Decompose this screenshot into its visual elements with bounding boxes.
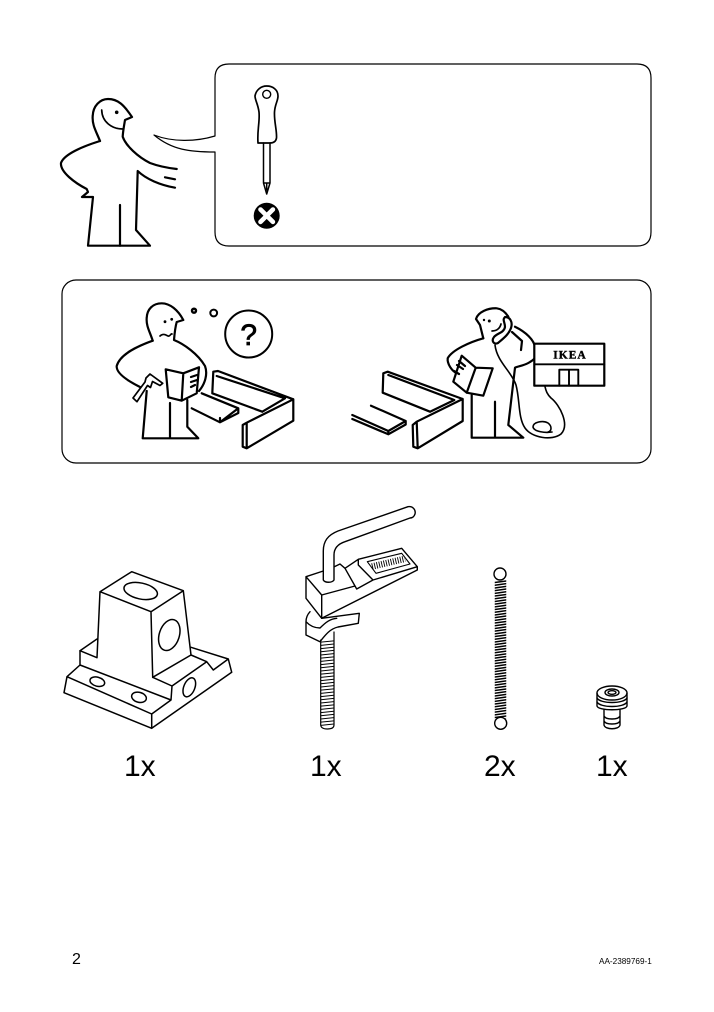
- document code: AA-2389769-1: [599, 957, 652, 966]
- quantity labels: [124, 750, 628, 783]
- clamp jaw: [306, 612, 359, 642]
- boards: [212, 371, 293, 448]
- icon: screwdriver: [255, 86, 278, 194]
- quantity labels: 1x: [124, 750, 156, 783]
- thought bubbles: ?: [240, 319, 257, 352]
- part: barrel nut: [597, 686, 627, 729]
- thought bubbles: [192, 309, 272, 358]
- part: clamp: [306, 507, 417, 729]
- quantity labels: 1x: [596, 750, 628, 783]
- part: mounting block: [64, 572, 232, 728]
- book: [166, 367, 199, 401]
- panel: no electric screwdriver callout: [154, 64, 651, 246]
- boards: [383, 372, 463, 448]
- figure: man phoning IKEA: [352, 308, 604, 448]
- threaded bolt: [321, 632, 334, 729]
- grip hatch: [367, 553, 410, 573]
- clamp body: [306, 548, 417, 618]
- panel: call IKEA advice: [62, 280, 651, 463]
- figure: confused man with book and hammer: [117, 303, 293, 448]
- part: threaded rod: [494, 568, 507, 729]
- book: [453, 356, 493, 396]
- quantity labels: 1x: [310, 750, 342, 783]
- telephone handset: [493, 317, 522, 350]
- IKEA store: IKEA: [553, 349, 587, 361]
- IKEA store: [534, 344, 604, 386]
- phone cord: [495, 345, 565, 438]
- clamp handle: [323, 507, 415, 582]
- page number: 2: [72, 951, 81, 968]
- figure: pointing man: [61, 99, 177, 246]
- hammer: [133, 374, 163, 402]
- quantity labels: 2x: [484, 750, 516, 783]
- speech bubble: [154, 64, 651, 246]
- icon: prohibited cross: [254, 203, 280, 229]
